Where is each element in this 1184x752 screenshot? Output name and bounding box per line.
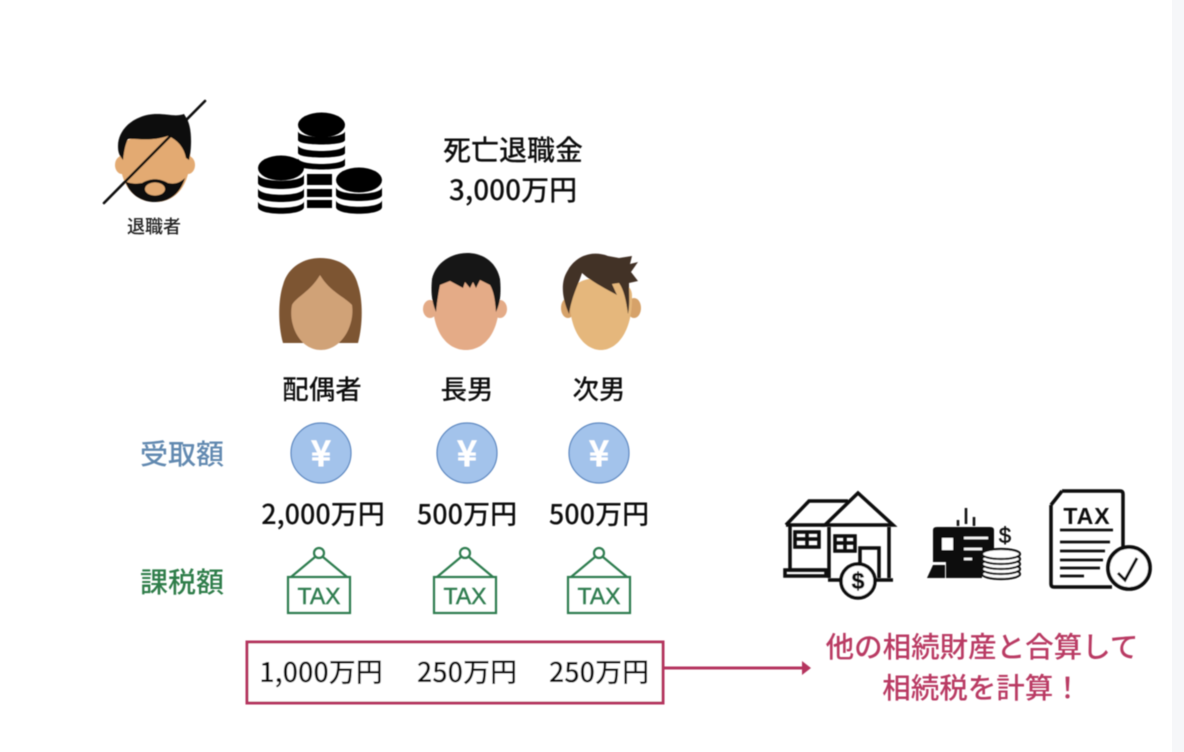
icon: coin stacks — [258, 112, 382, 214]
label: amount received: 受取額 — [140, 433, 224, 473]
icon: yen coin spouse: ¥ — [311, 426, 331, 477]
arrow: to inheritance tax — [664, 661, 811, 675]
icon: securities and coins — [927, 508, 1020, 579]
callout: combine with other inherited assets — [826, 625, 1138, 707]
panel: taxable amounts box — [247, 642, 663, 703]
icon: yen coin second son: ¥ — [589, 426, 609, 477]
icon: yen coin eldest son: ¥ — [457, 426, 477, 477]
callout: combine with other inherited assets: 相続税を計算！ — [882, 666, 1082, 707]
icon: tax document with check — [1051, 491, 1150, 589]
icon: houses with dollar: $ — [852, 568, 865, 594]
panel: taxable amounts box: 250万円 — [549, 651, 649, 690]
icon: tax sign eldest son — [434, 548, 496, 613]
icon: houses with dollar — [785, 493, 893, 598]
heading: death retirement benefit: 死亡退職金 — [443, 129, 583, 169]
label: eldest son: 長男 — [440, 368, 494, 407]
heading: death retirement benefit: 3,000万円 — [449, 169, 577, 209]
callout: combine with other inherited assets: 他の相続財産と合算して — [826, 625, 1138, 666]
icon: tax sign spouse — [288, 548, 350, 613]
label: retiree: 退職者 — [127, 213, 181, 239]
panel: taxable amounts box: 250万円 — [417, 651, 517, 690]
icon: securities and coins: $ — [999, 523, 1011, 548]
label: second son: 次男 — [572, 368, 626, 407]
icon: yen coin eldest son — [437, 423, 497, 483]
amount: eldest son received: 500万円 — [417, 493, 517, 532]
amount: spouse received: 2,000万円 — [261, 493, 385, 532]
icon: spouse — [279, 258, 362, 350]
icon: second son — [561, 254, 641, 350]
icon: tax document with check: TAX — [1063, 503, 1111, 529]
icon: retired person crossed out — [104, 101, 205, 203]
icon: tax sign second son: TAX — [577, 583, 621, 609]
icon: tax sign second son — [568, 548, 630, 613]
heading: death retirement benefit — [443, 129, 583, 209]
icon: yen coin spouse — [291, 423, 351, 483]
panel: taxable amounts box: 1,000万円 — [259, 651, 383, 690]
icon: tax sign eldest son: TAX — [443, 583, 487, 609]
amount: second son received: 500万円 — [549, 493, 649, 532]
icon: tax sign spouse: TAX — [297, 583, 341, 609]
label: spouse: 配偶者 — [282, 368, 362, 407]
label: taxable amount: 課税額 — [140, 561, 224, 601]
icon: yen coin second son — [569, 423, 629, 483]
icon: eldest son — [423, 253, 507, 350]
